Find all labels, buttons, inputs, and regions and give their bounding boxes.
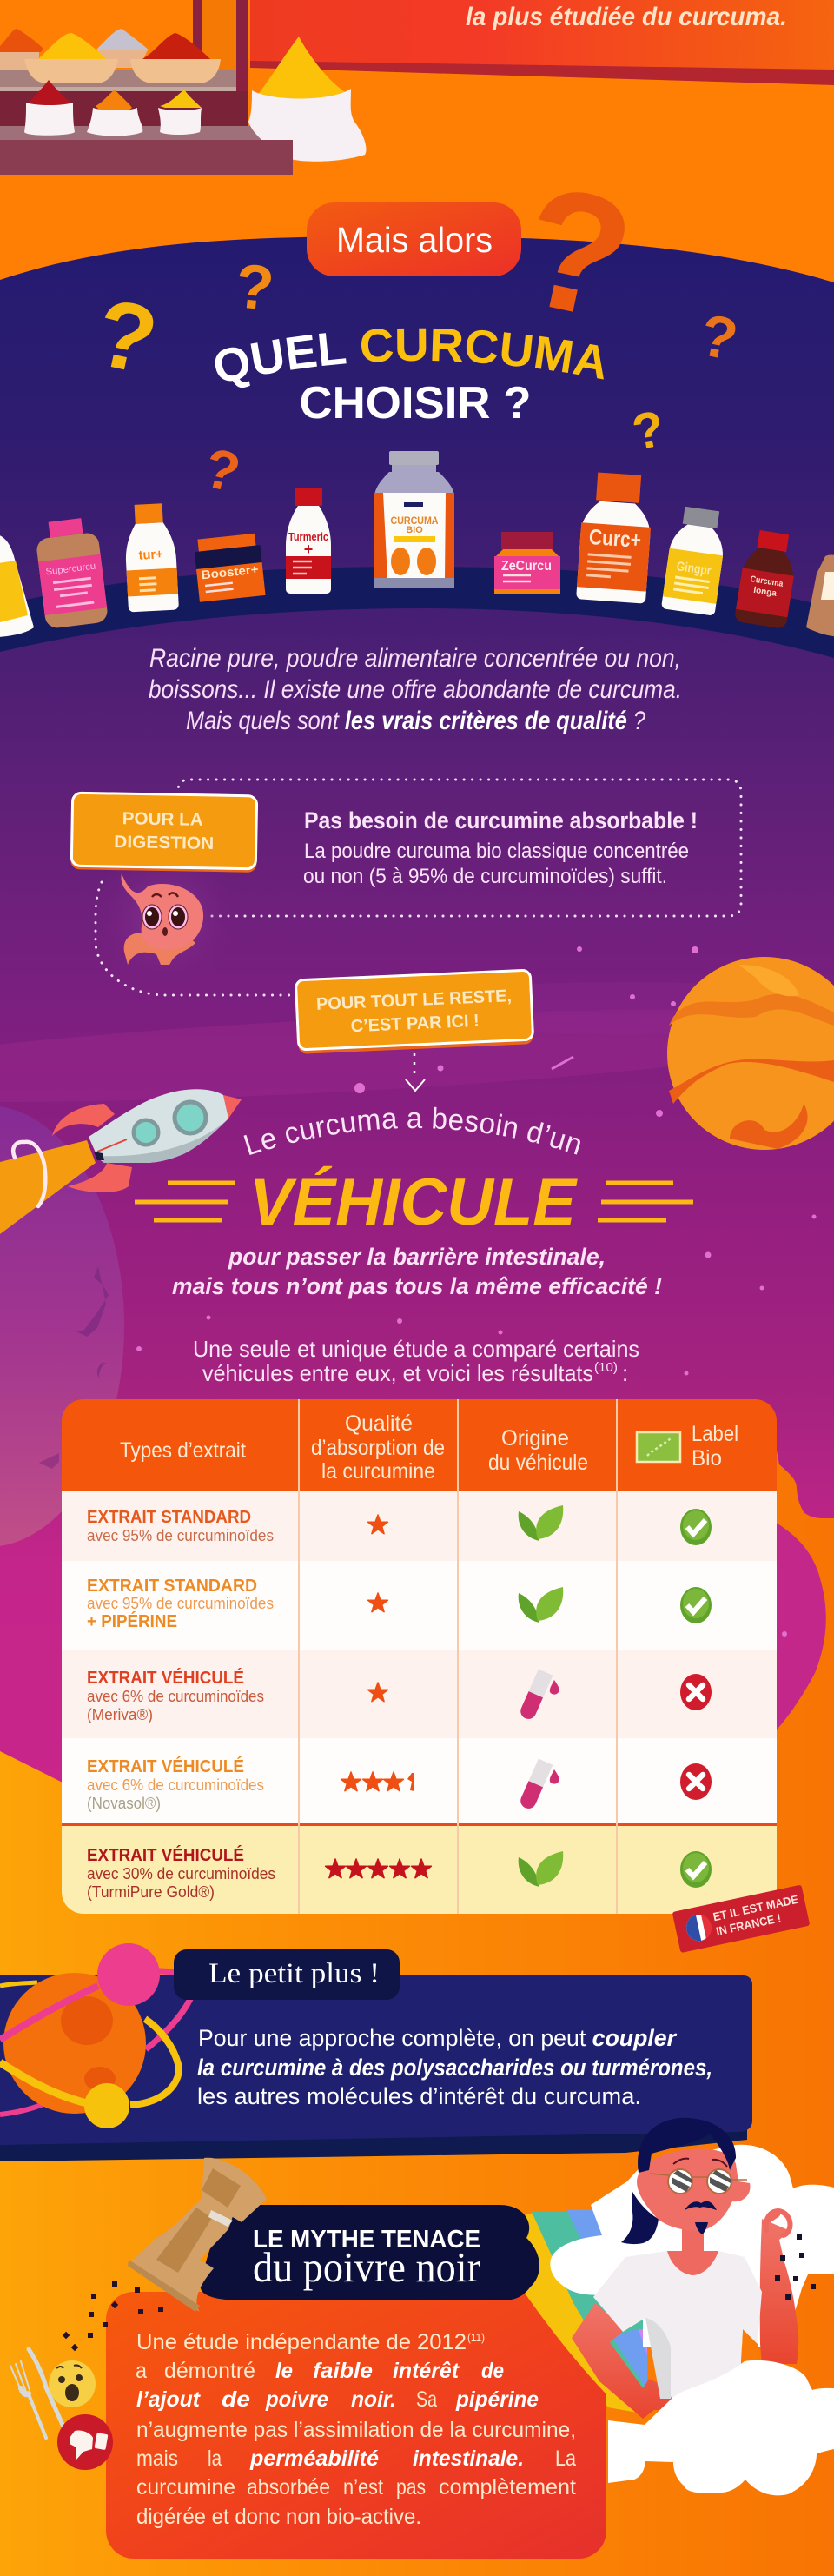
title: quel curcuma choisir: CHOISIR ?	[299, 378, 532, 428]
panel: le petit plus	[0, 1943, 752, 2161]
myth text: Une étude indépendante de 2012	[136, 2330, 467, 2354]
row 4 text: EXTRAIT VÉHICULÉ	[87, 1756, 244, 1776]
row 4 text	[87, 1756, 264, 1812]
header labels: Qualité	[345, 1411, 413, 1436]
pepper falling from hand	[775, 2234, 816, 2300]
man left arm	[572, 2303, 678, 2419]
text: pas besoin: La poudre curcuma bio classique concentrée	[304, 840, 689, 863]
bottle: Curc+	[576, 471, 654, 604]
man right arm	[760, 2219, 798, 2364]
line 3: pipérine	[455, 2387, 539, 2412]
header labels: Types d’extrait	[120, 1438, 246, 1463]
man hand pinch	[764, 2211, 791, 2235]
man goatee	[695, 2222, 708, 2234]
header labels: la curcumine	[321, 1459, 435, 1484]
dotted path	[96, 780, 741, 995]
badge text: DIGESTION	[114, 833, 214, 853]
line 3: Sa	[416, 2387, 437, 2412]
study intro text	[193, 1336, 639, 1386]
man orange gap	[741, 2329, 758, 2364]
bottle: Gingpr	[661, 505, 729, 616]
spice bowls	[0, 29, 221, 83]
title: quel curcuma choisir: QUEL CURCUMA	[215, 329, 604, 388]
panel text	[197, 2025, 712, 2109]
navy bottle arc	[0, 567, 834, 658]
bottle: Booster+	[193, 533, 266, 602]
bottle: Curcuma longa: longa	[753, 586, 778, 599]
panel text: la curcumine à des polysaccharides ou turmérones,	[197, 2055, 712, 2081]
man eyebrows	[673, 2159, 727, 2167]
bottle: cut right tan	[806, 554, 834, 637]
stars scattered on purple	[136, 946, 817, 1637]
star ratings	[326, 1515, 431, 1878]
line 6: pas	[396, 2475, 426, 2500]
rocket body	[89, 1089, 228, 1163]
bottle: Gingpr: Gingpr	[676, 559, 712, 579]
myth tab: du poivre noir	[253, 2243, 480, 2291]
badge text	[114, 809, 215, 853]
header labels: du véhicule	[488, 1451, 588, 1475]
panel tab	[174, 1949, 400, 2000]
bottle: ZeCurcu	[494, 532, 560, 594]
study intro text: véhicules entre eux, et voici les résultats	[202, 1360, 593, 1386]
line 6: absorbée	[247, 2475, 330, 2500]
badge text: POUR LA	[122, 809, 203, 830]
pepper grains	[63, 2281, 163, 2351]
line 5: La	[555, 2447, 576, 2471]
spice stall	[0, 0, 367, 175]
man glasses	[650, 2169, 747, 2194]
rainbow	[521, 2209, 647, 2414]
line 2: le	[275, 2359, 293, 2383]
intro paragraph: Racine pure, poudre alimentaire concentrée ou non,	[149, 644, 681, 673]
table rows	[62, 1491, 777, 1914]
cloud upper	[550, 2145, 834, 2347]
header labels: Label	[692, 1422, 738, 1446]
badge: made in France: ET IL EST MADE	[712, 1893, 799, 1923]
badge text: C’EST PAR ICI !	[350, 1012, 480, 1036]
french flag	[684, 1912, 714, 1943]
panel text: Pour une approche complète, on peut coupler	[198, 2025, 677, 2051]
line 3	[136, 2387, 539, 2412]
badge text: POUR TOUT LE RESTE,	[316, 986, 512, 1014]
character: man with pepper	[572, 2118, 816, 2419]
row 4 text: (Novasol®)	[87, 1795, 161, 1812]
product bottles row	[0, 451, 834, 637]
header labels: d’absorption de	[311, 1436, 445, 1460]
row 2 text: avec 95% de curcuminoïdes	[87, 1595, 274, 1612]
icon: thumbs down	[57, 2414, 113, 2470]
line 3: poivre	[265, 2387, 328, 2412]
text: pas besoin: ou non (5 à 95% de curcuminoïdes) suffit.	[303, 865, 667, 888]
vehicle origin icons	[518, 1505, 563, 1887]
study intro text: Une seule et unique étude a comparé certains	[193, 1336, 639, 1362]
line 5: intestinale.	[413, 2447, 524, 2471]
icon: surprised emoji	[49, 2360, 96, 2407]
cloud and rainbow behind man	[521, 2145, 834, 2414]
row 5 text: (TurmiPure Gold®)	[87, 1883, 215, 1901]
line 3: de	[222, 2387, 250, 2412]
myth tab: LE MYTHE TENACE	[253, 2226, 480, 2254]
line 2: intérêt	[393, 2359, 460, 2383]
myth text	[136, 2330, 576, 2529]
icon: cutlery	[10, 2349, 63, 2438]
myth tab	[201, 2205, 539, 2300]
panel text: les autres molécules d’intérêt du curcuma.	[197, 2083, 641, 2109]
row 1 text	[87, 1508, 274, 1544]
badge: made in France: IN FRANCE !	[715, 1911, 782, 1938]
study intro text: (10)	[594, 1360, 618, 1375]
comparison table	[62, 1399, 777, 1914]
row 5 text	[87, 1845, 275, 1901]
row 2 text: EXTRAIT STANDARD	[87, 1577, 257, 1596]
clouds at foot	[608, 2360, 834, 2495]
text: pas besoin: Pas besoin de curcumine absorbable !	[304, 807, 698, 833]
row 3 text: (Meriva®)	[87, 1706, 153, 1723]
bottle: cut left yellow	[0, 534, 34, 637]
bottle: Curcuma longa	[734, 528, 800, 629]
line 6: curcumine	[136, 2475, 235, 2500]
question marks small: ?	[628, 400, 668, 461]
question marks small: ?	[694, 302, 744, 374]
man shirt	[593, 2251, 762, 2399]
bottle: Supercurcu	[34, 516, 109, 629]
bottle: Curcuma Bio (central): CURCUMA	[391, 515, 439, 527]
bottle: Curcuma longa: Curcuma	[750, 574, 784, 589]
bottle: Curcuma Bio (central)	[374, 451, 454, 588]
organic label status icons	[680, 1509, 712, 1888]
badge: pour la digestion	[70, 793, 258, 873]
line 5: mais	[136, 2447, 178, 2471]
icon: stomach character	[121, 873, 203, 965]
row 4 text: avec 6% de curcuminoïdes	[87, 1776, 264, 1794]
man head	[637, 2149, 750, 2231]
man moustache	[685, 2201, 717, 2210]
row 2 text	[87, 1577, 274, 1631]
subheading: mais tous n’ont pas tous la même efficacité !	[172, 1273, 662, 1299]
heading pill: Mais alors	[307, 202, 521, 276]
badge: made in France	[672, 1885, 810, 1953]
row 5 text: EXTRAIT VÉHICULÉ	[87, 1845, 244, 1865]
subheading	[172, 1244, 662, 1299]
intro paragraph	[149, 644, 682, 735]
line 6	[136, 2475, 576, 2500]
line 2: faible	[313, 2359, 373, 2383]
stomach glow	[91, 843, 239, 991]
header labels	[120, 1411, 738, 1484]
man hair back	[621, 2190, 659, 2244]
flame	[0, 1140, 96, 1234]
row 5 text: avec 30% de curcuminoïdes	[87, 1865, 275, 1882]
intro paragraph: Mais quels sont les vrais critères de qualité ?	[186, 707, 645, 735]
row 1 text: avec 95% de curcuminoïdes	[87, 1527, 274, 1544]
title: quel curcuma choisir	[215, 329, 604, 428]
background: purple dome	[0, 236, 834, 1825]
question marks small: ?	[232, 251, 277, 324]
spice sacks	[24, 80, 202, 136]
fins	[52, 1104, 115, 1136]
row 3 text: avec 6% de curcuminoïdes	[87, 1688, 264, 1705]
table header	[62, 1399, 777, 1491]
top banner	[250, 0, 834, 85]
panel: poivre noir myth	[106, 2292, 606, 2559]
rocket windows	[132, 1118, 160, 1147]
myth text: digérée et donc non bio-active.	[136, 2505, 421, 2529]
heading: le curcuma a besoin d'un: Le curcuma a besoin d’un	[243, 1107, 580, 1155]
subheading: pour passer la barrière intestinale,	[228, 1244, 606, 1270]
line 6: n’est	[343, 2475, 383, 2500]
icon: organic label	[637, 1432, 680, 1462]
line 2: a	[136, 2359, 147, 2383]
bottle: ZeCurcu: ZeCurcu	[501, 559, 552, 574]
row 3 text: EXTRAIT VÉHICULÉ	[87, 1668, 244, 1688]
arrow: dotted down	[406, 1053, 425, 1091]
man hair	[638, 2118, 736, 2173]
myth text: (11)	[467, 2331, 485, 2344]
bottle: tur+: tur+	[138, 547, 163, 563]
question marks small	[87, 251, 744, 505]
question mark large: ?	[506, 149, 647, 356]
badge text	[316, 986, 513, 1038]
bottle: Curcuma Bio (central): BIO	[406, 525, 423, 535]
rocket with flame	[0, 1089, 242, 1234]
line 2	[136, 2359, 504, 2383]
icon: pepper mill	[128, 2158, 267, 2312]
row 2 text: + PIPÉRINE	[87, 1611, 177, 1631]
bottle: Turmeric +: +	[304, 541, 313, 558]
question marks small: ?	[198, 435, 246, 505]
man neck	[667, 2225, 718, 2275]
line 2: de	[481, 2359, 504, 2383]
intro paragraph: boissons... Il existe une offre abondante de curcuma.	[149, 675, 682, 704]
panel tab: Le petit plus !	[208, 1958, 380, 1989]
line 6: complètement	[439, 2475, 576, 2500]
line 5: la	[208, 2447, 222, 2471]
bottle: Turmeric +: Turmeric	[288, 530, 328, 543]
text: pas besoin	[303, 807, 698, 888]
line 3: noir.	[351, 2387, 396, 2412]
banner text: la plus étudiée du curcuma.	[466, 3, 787, 31]
bottle: Turmeric +	[286, 488, 331, 594]
pill text: Mais alors	[336, 220, 493, 260]
myth text: n’augmente pas l’assimilation de la curcumine,	[136, 2418, 576, 2442]
bottle: Curc+: Curc+	[588, 525, 642, 553]
line 3: l’ajout	[136, 2387, 202, 2412]
badge: pour tout le reste	[295, 970, 533, 1054]
question marks small: ?	[87, 278, 166, 395]
study intro text: :	[622, 1360, 628, 1386]
line 5: perméabilité	[249, 2447, 379, 2471]
background: bottom orange waves	[0, 1404, 834, 2576]
stomach eyes	[142, 893, 188, 936]
background: nebula band	[0, 982, 834, 1120]
icon: planet with rings	[0, 1943, 195, 2128]
bottle: Booster+: Booster+	[201, 562, 259, 581]
row 1 text: EXTRAIT STANDARD	[87, 1508, 251, 1527]
header labels: Bio	[692, 1446, 722, 1471]
header labels: Origine	[501, 1426, 569, 1451]
background: left purple planet	[0, 1105, 124, 1547]
heading: vehicule	[135, 1165, 693, 1239]
big sack of turmeric	[0, 37, 367, 175]
line 2: démontré	[164, 2359, 255, 2383]
row 3 text	[87, 1668, 264, 1723]
bottle: Supercurcu: Supercurcu	[45, 561, 96, 578]
line 5	[136, 2447, 576, 2471]
planet: orange right	[667, 957, 834, 1150]
heading: vehicule: VÉHICULE	[249, 1165, 578, 1239]
bottle: tur+	[123, 503, 179, 612]
